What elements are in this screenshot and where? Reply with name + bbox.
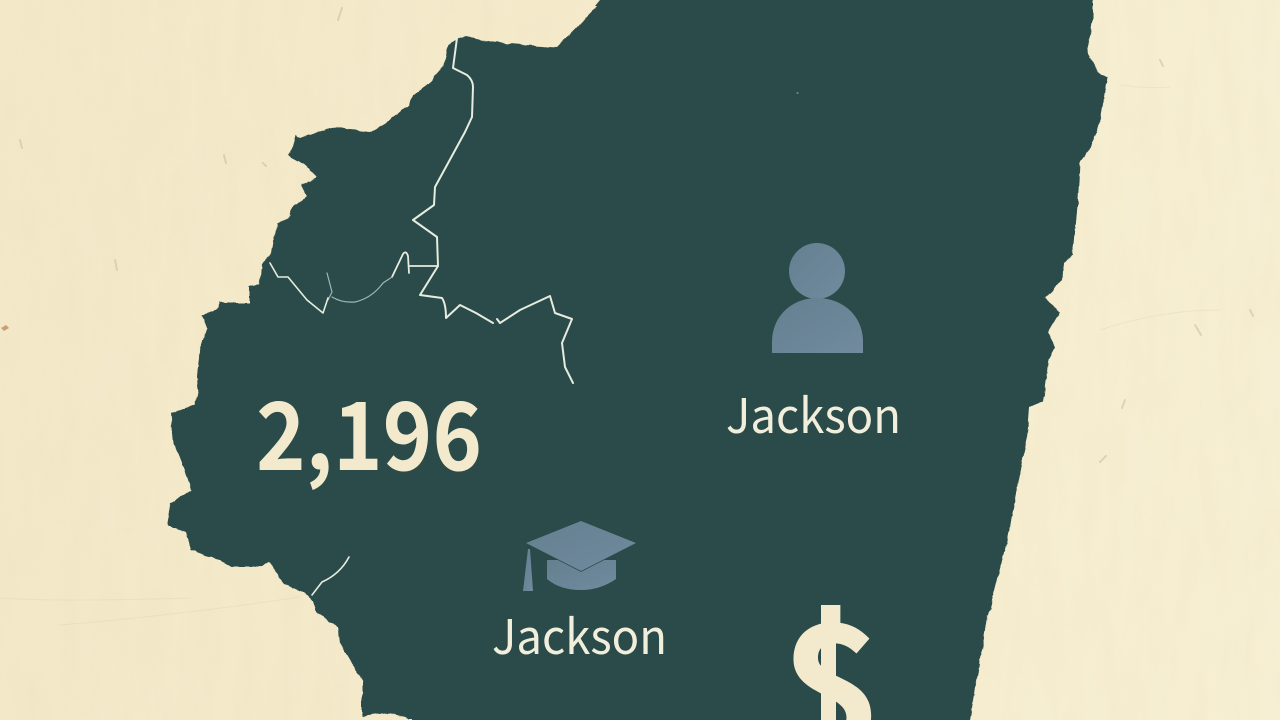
map: county silhouette [167, 0, 1107, 720]
map: boundary rivers [270, 38, 798, 595]
label: Jackson under person: Jackson [726, 377, 901, 447]
icon: graduation cap [523, 521, 636, 591]
statistic: 2,196: 2,196 [256, 362, 482, 498]
label: Jackson under cap: Jackson [492, 598, 667, 668]
icon: person [772, 243, 863, 353]
